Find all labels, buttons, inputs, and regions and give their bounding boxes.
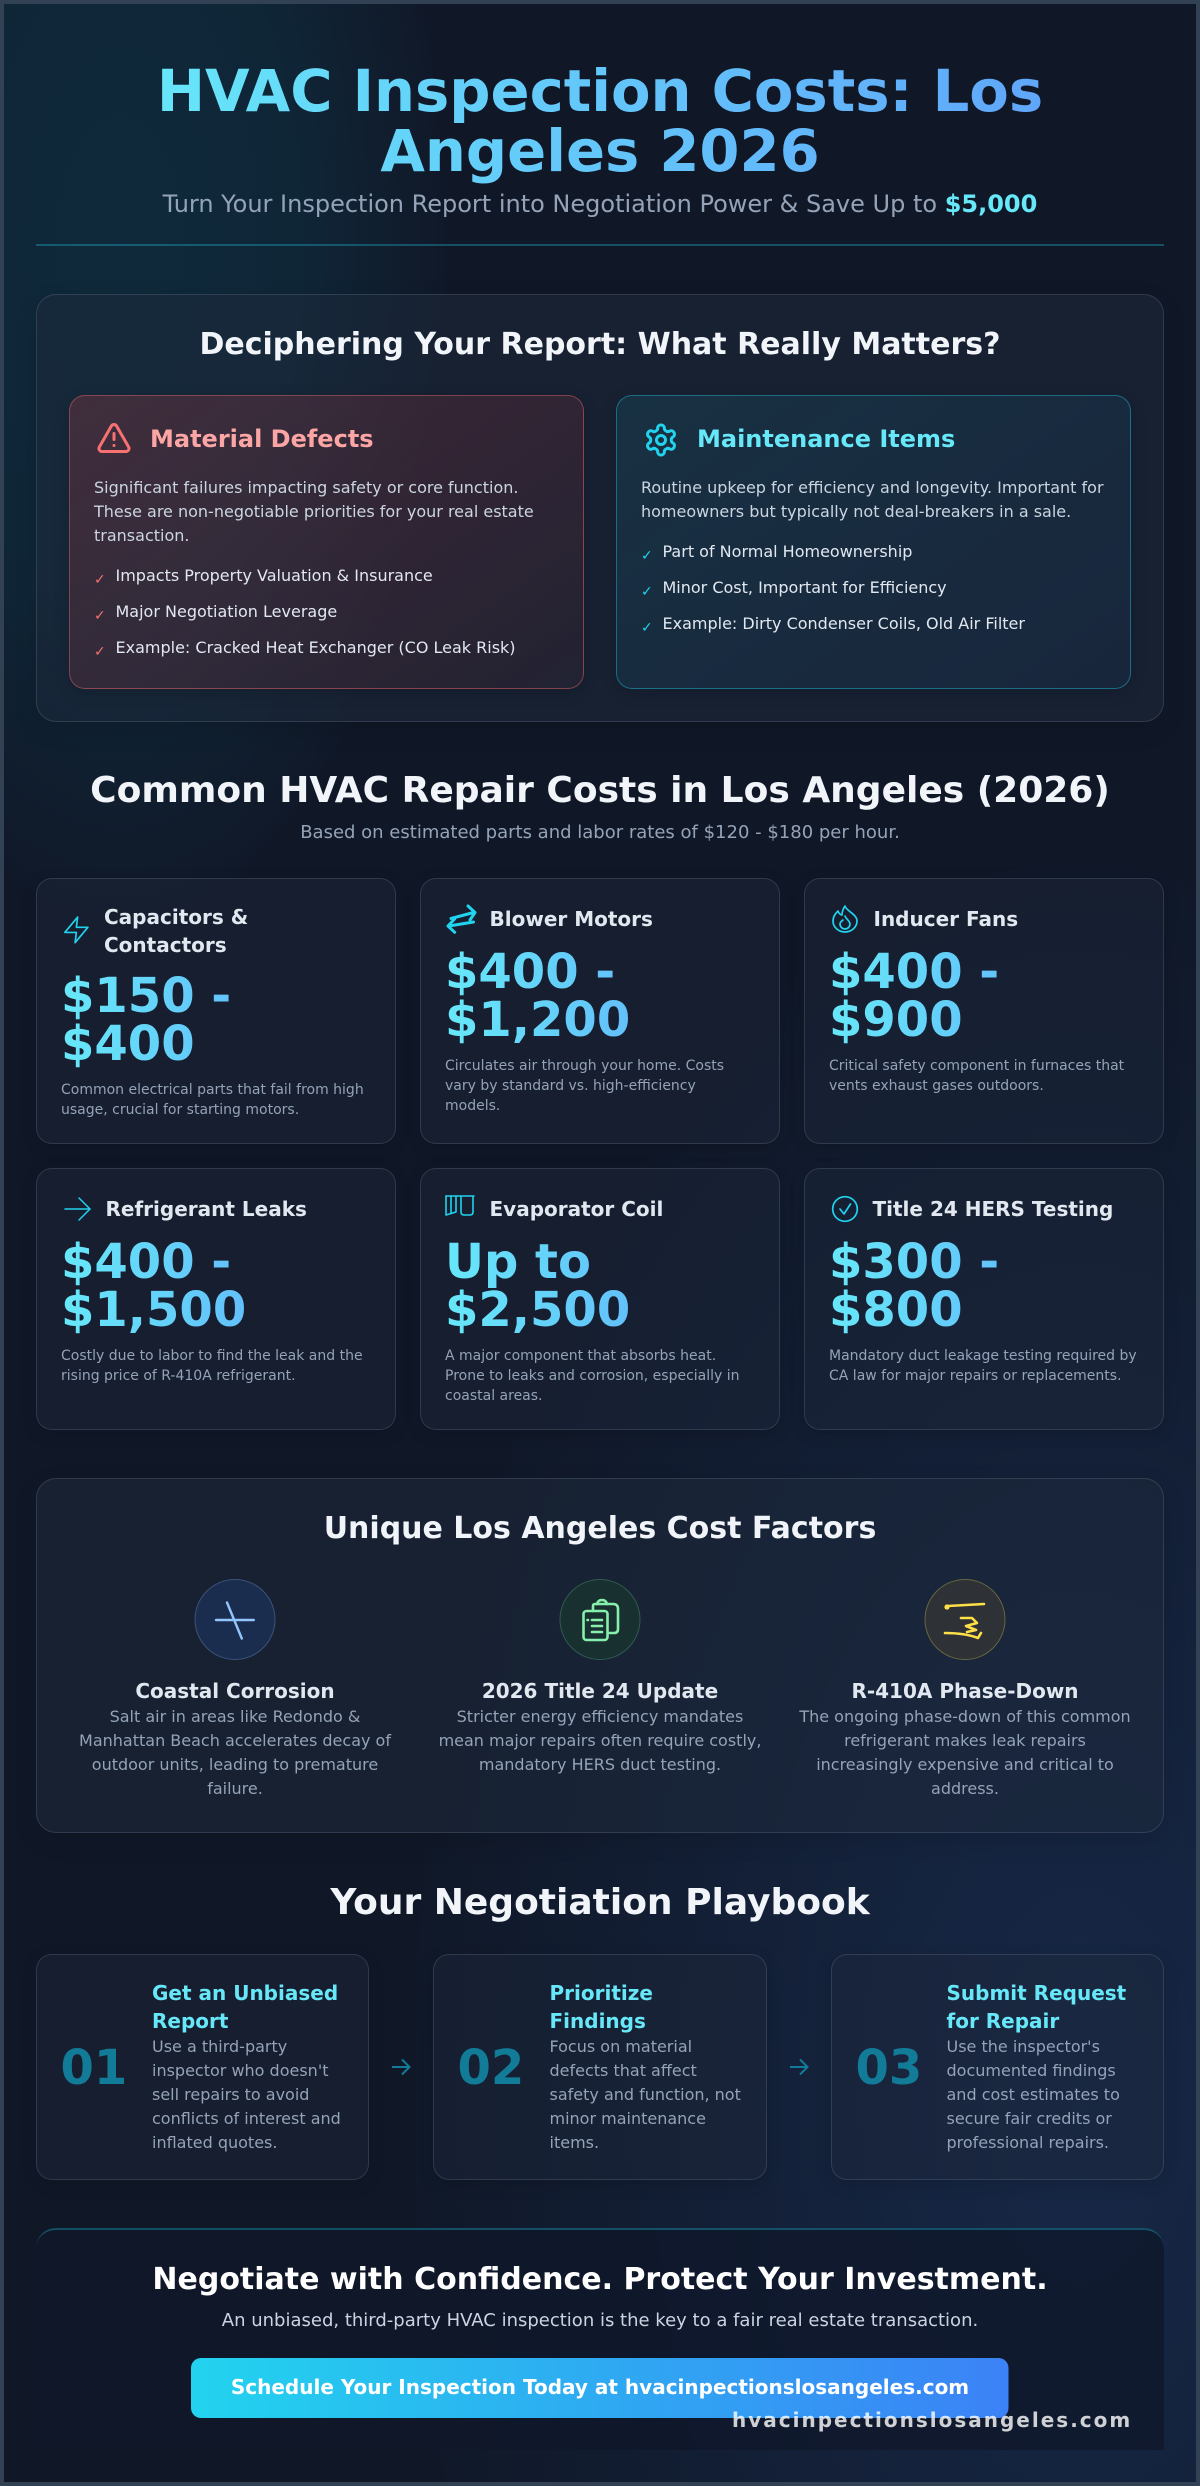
material defects description: transaction. bbox=[94, 526, 189, 545]
icon: lightning bolt bbox=[65, 917, 88, 943]
step description: documented findings bbox=[946, 2061, 1116, 2080]
watermark url: hvacinpectionslosangeles.com bbox=[732, 2408, 1132, 2432]
description: CA law for major repairs or replacements. bbox=[829, 1368, 1122, 1384]
icon: flame bbox=[833, 906, 857, 932]
card title: Title 24 HERS Testing bbox=[872, 1197, 1113, 1221]
card title: Capacitors & bbox=[104, 905, 248, 929]
step title: Prioritize bbox=[550, 1981, 653, 2005]
step title: Submit Request bbox=[946, 1981, 1127, 2005]
icon: arrow right bbox=[65, 1198, 90, 1220]
maintenance items description: Routine upkeep for efficiency and longevity. Important for bbox=[641, 478, 1104, 497]
step description: professional repairs. bbox=[946, 2133, 1109, 2152]
step description: defects that affect bbox=[550, 2061, 697, 2080]
description: Prone to leaks and corrosion, especially in bbox=[445, 1368, 740, 1384]
step description: inflated quotes. bbox=[152, 2133, 277, 2152]
cta button bbox=[191, 2358, 1008, 2418]
maintenance items list: ✓ bbox=[641, 548, 653, 564]
factor description: Manhattan Beach accelerates decay of bbox=[79, 1731, 391, 1750]
icon: check circle bbox=[833, 1197, 857, 1221]
step description: Focus on material bbox=[550, 2037, 692, 2056]
price: $400 bbox=[61, 1016, 195, 1072]
factor title: 2026 Title 24 Update bbox=[482, 1679, 718, 1703]
description: models. bbox=[445, 1098, 500, 1114]
icon: clipboard circle bbox=[560, 1580, 640, 1660]
factor description: address. bbox=[931, 1779, 999, 1798]
card: title 24 hers testing bbox=[804, 1168, 1164, 1430]
step description: items. bbox=[550, 2133, 599, 2152]
price: $1,500 bbox=[61, 1282, 246, 1338]
step description: minor maintenance bbox=[550, 2109, 706, 2128]
factor title: Coastal Corrosion bbox=[135, 1679, 335, 1703]
step description: inspector who doesn't bbox=[152, 2061, 328, 2080]
step description: Use a third-party bbox=[152, 2037, 287, 2056]
step title: Report bbox=[152, 2009, 229, 2033]
description: A major component that absorbs heat. bbox=[445, 1348, 716, 1364]
icon: warning triangle bbox=[99, 424, 129, 452]
material defects description: Significant failures impacting safety or core function. bbox=[94, 478, 518, 497]
cta heading: Negotiate with Confidence. Protect Your Investment. bbox=[152, 2262, 1048, 2296]
card: evaporator coil bbox=[420, 1168, 780, 1430]
maintenance items list: Part of Normal Homeownership bbox=[662, 542, 912, 561]
icon: phase-down circle bbox=[925, 1580, 1005, 1660]
price: $400 - bbox=[445, 944, 615, 1000]
description: Mandatory duct leakage testing required by bbox=[829, 1348, 1137, 1364]
material defects list: ✓ bbox=[94, 608, 106, 624]
subtitle: Turn Your Inspection Report into Negotiation Power & Save Up to $5,000 bbox=[162, 190, 1037, 218]
heading: deciphering: Deciphering Your Report: What Really Matters? bbox=[199, 327, 1001, 362]
material defects list: Major Negotiation Leverage bbox=[116, 602, 337, 621]
step description: Use the inspector's bbox=[946, 2037, 1100, 2056]
factor title: R-410A Phase-Down bbox=[851, 1679, 1079, 1703]
title: HVAC Inspection Costs: Los bbox=[157, 58, 1043, 125]
description: Circulates air through your home. Costs bbox=[445, 1058, 724, 1074]
factor description: failure. bbox=[207, 1779, 263, 1798]
card: maintenance items bbox=[616, 395, 1131, 689]
factor description: Stricter energy efficiency mandates bbox=[457, 1707, 743, 1726]
card: material defects bbox=[69, 395, 584, 689]
description: vary by standard vs. high-efficiency bbox=[445, 1078, 696, 1094]
price: $300 - bbox=[829, 1234, 999, 1290]
step 3 bbox=[831, 1954, 1164, 2180]
card: refrigerant leaks bbox=[36, 1168, 396, 1430]
icon: exchange arrows bbox=[448, 906, 475, 932]
heading block: repair costs bbox=[90, 770, 1110, 843]
step 1 bbox=[36, 1954, 369, 2180]
maintenance items list: ✓ bbox=[641, 620, 653, 636]
step title: Findings bbox=[550, 2009, 646, 2033]
step number: 03 bbox=[856, 2040, 922, 2096]
description: Critical safety component in furnaces that bbox=[829, 1058, 1125, 1074]
icon: evaporator coil bbox=[446, 1196, 474, 1215]
description: coastal areas. bbox=[445, 1388, 543, 1404]
panel: call to action bbox=[36, 2228, 1164, 2450]
card title: Blower Motors bbox=[490, 907, 653, 931]
step description: conflicts of interest and bbox=[152, 2109, 341, 2128]
icon: gear bbox=[647, 425, 675, 455]
step number: 02 bbox=[458, 2040, 524, 2096]
price: $400 - bbox=[61, 1234, 231, 1290]
price: $400 - bbox=[829, 944, 999, 1000]
material defects description: These are non-negotiable priorities for your real estate bbox=[93, 502, 534, 521]
section subtitle: Based on estimated parts and labor rates of $120 - $180 per hour. bbox=[300, 822, 900, 843]
price: $1,200 bbox=[445, 992, 630, 1048]
material defects list: Example: Cracked Heat Exchanger (CO Leak Risk) bbox=[116, 638, 516, 657]
step description: secure fair credits or bbox=[946, 2109, 1112, 2128]
card title: Refrigerant Leaks bbox=[106, 1197, 307, 1221]
header: title and subtitle bbox=[36, 34, 1164, 246]
factor description: increasingly expensive and critical to bbox=[816, 1755, 1114, 1774]
price: $150 - bbox=[61, 968, 231, 1024]
card title: Contactors bbox=[104, 933, 227, 957]
card: blower motors bbox=[420, 878, 780, 1144]
panel: deciphering your report bbox=[36, 294, 1164, 722]
description: rising price of R-410A refrigerant. bbox=[61, 1368, 296, 1384]
step description: sell repairs to avoid bbox=[152, 2085, 309, 2104]
title: Angeles 2026 bbox=[380, 118, 820, 185]
description: usage, crucial for starting motors. bbox=[61, 1102, 299, 1118]
material defects list: ✓ bbox=[94, 644, 106, 660]
heading: negotiation playbook: Your Negotiation Playbook bbox=[329, 1882, 871, 1923]
step title: Get an Unbiased bbox=[152, 1981, 338, 2005]
icon: coastal corrosion circle bbox=[195, 1580, 275, 1660]
arrow: step 1 to 2 bbox=[392, 2058, 411, 2076]
price: $2,500 bbox=[445, 1282, 630, 1338]
maintenance items description: homeowners but typically not deal-breakers in a sale. bbox=[641, 502, 1071, 521]
factor description: outdoor units, leading to premature bbox=[92, 1755, 378, 1774]
material defects list: ✓ bbox=[94, 572, 106, 588]
factor: coastal corrosion bbox=[79, 1580, 391, 1798]
price: Up to bbox=[445, 1234, 591, 1290]
cta text: An unbiased, third-party HVAC inspection is the key to a fair real estate transaction. bbox=[222, 2310, 978, 2330]
factor description: refrigerant makes leak repairs bbox=[844, 1731, 1086, 1750]
factor description: mean major repairs often require costly, bbox=[439, 1731, 761, 1750]
step description: and cost estimates to bbox=[946, 2085, 1120, 2104]
factor: title 24 update bbox=[439, 1580, 761, 1774]
card title: Evaporator Coil bbox=[490, 1197, 663, 1221]
description: vents exhaust gases outdoors. bbox=[829, 1078, 1044, 1094]
arrow: step 2 to 3 bbox=[790, 2058, 809, 2076]
card: capacitors and contactors bbox=[36, 878, 396, 1144]
maintenance items list: Minor Cost, Important for Efficiency bbox=[662, 578, 947, 597]
card title: Inducer Fans bbox=[874, 907, 1018, 931]
material defects heading: Material Defects bbox=[150, 425, 374, 453]
step 2 bbox=[433, 1954, 767, 2180]
maintenance items list: Example: Dirty Condenser Coils, Old Air Filter bbox=[662, 614, 1025, 633]
maintenance items list bbox=[641, 542, 1025, 636]
price: $800 bbox=[829, 1282, 963, 1338]
maintenance items list: ✓ bbox=[641, 584, 653, 600]
step title: for Repair bbox=[946, 2009, 1059, 2033]
cta button: Schedule Your Inspection Today at hvacinpectionslosangeles.com bbox=[231, 2374, 969, 2398]
factor description: Salt air in areas like Redondo & bbox=[110, 1707, 360, 1726]
description: Costly due to labor to find the leak and the bbox=[61, 1348, 363, 1364]
panel: unique los angeles cost factors bbox=[36, 1478, 1164, 1833]
factor: r-410a phase-down bbox=[798, 1580, 1131, 1798]
step number: 01 bbox=[60, 2040, 127, 2096]
card: inducer fans bbox=[804, 878, 1164, 1144]
step description: safety and function, not bbox=[550, 2085, 741, 2104]
factor description: mandatory HERS duct testing. bbox=[479, 1755, 721, 1774]
description: Common electrical parts that fail from high bbox=[61, 1082, 364, 1098]
maintenance items heading: Maintenance Items bbox=[697, 425, 955, 453]
price: $900 bbox=[829, 992, 963, 1048]
heading: cost factors: Unique Los Angeles Cost Factors bbox=[324, 1511, 876, 1546]
material defects list bbox=[94, 566, 516, 660]
section title: Common HVAC Repair Costs in Los Angeles (2026) bbox=[90, 770, 1110, 811]
factor description: The ongoing phase-down of this common bbox=[798, 1707, 1131, 1726]
material defects list: Impacts Property Valuation & Insurance bbox=[116, 566, 433, 585]
